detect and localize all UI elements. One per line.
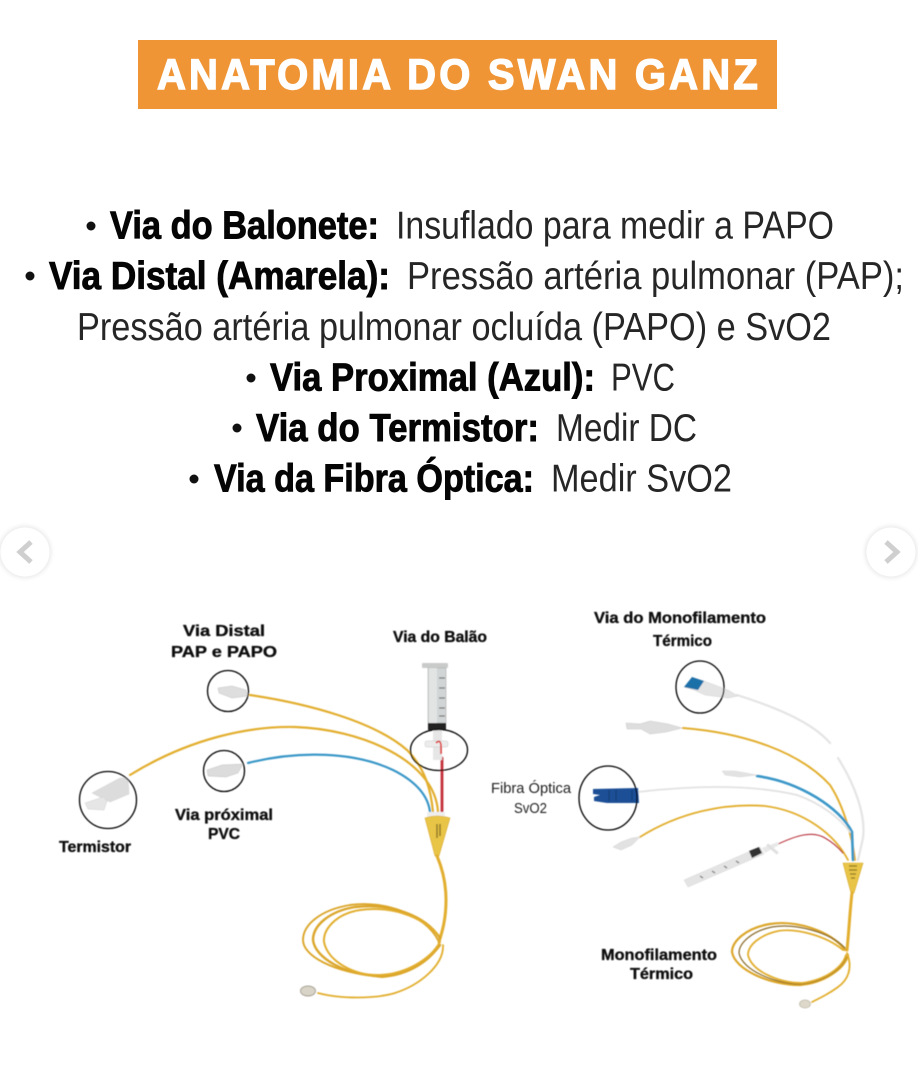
line: via do balonete — [86, 204, 834, 248]
label: via do monofilamento termico: Via do Monofilamento — [594, 610, 766, 627]
tube: balloon red — [776, 834, 843, 853]
tube: thermistor yellow — [130, 727, 438, 812]
line: via proximal: Via Proximal (Azul): — [270, 356, 595, 400]
tube: yellow lower — [640, 805, 848, 860]
line: via distal — [26, 255, 904, 298]
label: termistor: Termistor — [59, 839, 131, 856]
icon: previous arrow — [0, 526, 51, 578]
label: fibra optica svo2: Fibra Óptica — [491, 780, 572, 797]
line: via do balonete: Insuflado para medir a PAPO — [396, 204, 834, 248]
label: via distal — [171, 623, 277, 661]
line: via do termistor — [232, 407, 697, 450]
tube: catheter body and coils — [732, 893, 852, 1008]
line: via da fibra optica — [190, 456, 732, 500]
label: via proximal: Via próximal — [175, 807, 273, 824]
label: monofilamento termico — [601, 947, 717, 983]
label: monofilamento termico: Monofilamento — [601, 947, 717, 964]
label: via distal: Via Distal — [183, 623, 265, 640]
line: via distal: Via Distal (Amarela): — [49, 255, 390, 298]
icon: distal connector — [208, 670, 248, 712]
line: via proximal: PVC — [611, 356, 675, 400]
label: via do monofilamento termico — [594, 610, 766, 650]
icon: yellow connector white — [626, 721, 682, 734]
tube: proximal blue — [757, 776, 853, 860]
label: via proximal: PVC — [208, 826, 240, 843]
icon: syringe — [422, 663, 448, 760]
diagram: swan ganz catheter, right — [579, 661, 863, 1008]
tube: proximal blue — [248, 755, 430, 812]
line: via do termistor: Via do Termistor: — [256, 407, 539, 450]
tube: yellow upper — [683, 728, 855, 860]
icon: proximal connector — [204, 750, 244, 792]
label: monofilamento termico: Térmico — [630, 966, 693, 983]
icon: catheter hub — [425, 812, 450, 856]
icon: syringe — [684, 842, 779, 887]
icon: next arrow — [865, 526, 917, 578]
line: via da fibra optica: Medir SvO2 — [551, 458, 732, 500]
text block: catheter ports — [26, 204, 904, 500]
title — [138, 40, 777, 109]
tube: catheter body and coils — [300, 856, 446, 998]
title: ANATOMIA DO SWAN GANZ — [157, 50, 758, 98]
icon: thermistor connector — [80, 772, 136, 828]
line: via distal continued: Pressão artéria pulmonar ocluída (PAPO) e SvO2 — [77, 306, 831, 349]
tube: fiber optic white — [638, 787, 850, 832]
icon: lower connector white — [613, 837, 640, 850]
line: via do termistor: Medir DC — [556, 407, 697, 450]
icon: thermal filament connector — [676, 661, 738, 713]
circle: balloon port — [410, 730, 468, 770]
label: via distal: PAP e PAPO — [171, 644, 277, 661]
labels: left diagram — [59, 623, 487, 856]
diagram: swan ganz catheter, left — [80, 663, 468, 998]
label: fibra optica svo2 — [491, 780, 572, 817]
label: fibra optica svo2: SvO2 — [514, 801, 547, 817]
label: via do monofilamento termico: Térmico — [653, 633, 712, 650]
icon: proximal connector white — [722, 771, 757, 777]
tube: balloon red — [441, 758, 443, 812]
labels: right diagram — [491, 610, 766, 983]
icon: fiber optic connector — [579, 766, 639, 830]
tube: thermal filament white — [737, 695, 863, 860]
icon: catheter hub — [843, 863, 863, 893]
label: via do balao: Via do Balão — [393, 629, 487, 646]
line: via da fibra optica: Via da Fibra Óptica: — [214, 456, 534, 500]
tube: distal yellow — [250, 695, 433, 812]
label: via proximal — [175, 807, 273, 843]
line: via do balonete: Via do Balonete: — [110, 204, 379, 248]
